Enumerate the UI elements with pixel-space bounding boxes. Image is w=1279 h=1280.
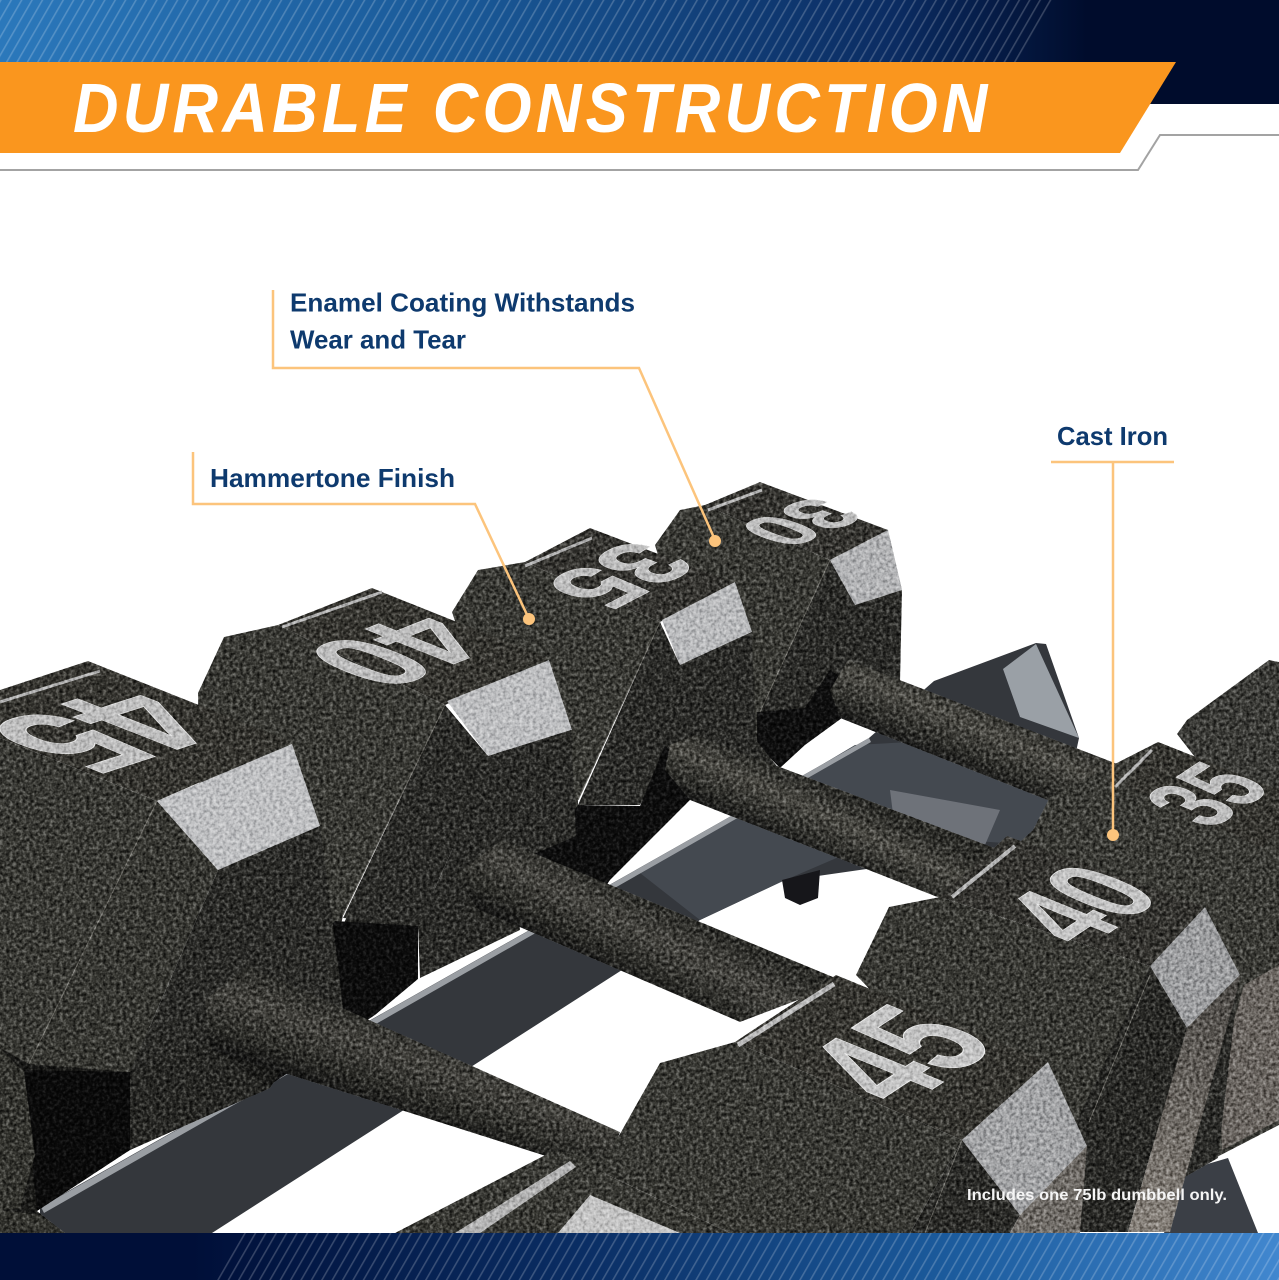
callout: enamel coating: Enamel Coating Withstands	[290, 288, 635, 318]
callout: enamel coating	[273, 288, 721, 547]
title banner: DURABLE CONSTRUCTION	[73, 70, 989, 148]
header white cut and rule	[0, 104, 1279, 190]
dumbbell 45 front row: 45	[762, 987, 1034, 1122]
dumbbell 30 back row	[655, 482, 902, 768]
footnote: Includes one 75lb dumbbell only.	[967, 1187, 1227, 1204]
callout: enamel coating: Wear and Tear	[290, 324, 466, 354]
dumbbell 30 back row: 30	[716, 489, 884, 555]
dumbbell 35 back row: 35	[519, 530, 723, 620]
dumbbell 35 front row	[1020, 742, 1279, 1172]
callout: cast iron: Cast Iron	[1057, 421, 1168, 451]
title banner	[0, 62, 1176, 153]
callout: hammertone finish	[193, 452, 535, 625]
handle 30	[830, 660, 1120, 805]
handle 40	[455, 840, 845, 1022]
dumbbell 40 back row	[198, 588, 576, 1085]
handle 35	[665, 735, 1005, 900]
header band	[0, 0, 1279, 104]
dumbbell bottom front	[395, 1150, 730, 1233]
callout: hammertone finish: Hammertone Finish	[210, 463, 455, 493]
dumbbell 40 front row: 40	[970, 849, 1192, 960]
dumbbell 40 front row	[856, 836, 1240, 1232]
dumbbell rack	[40, 643, 1258, 1233]
handle 45	[205, 966, 620, 1175]
dumbbell top right	[1177, 660, 1279, 800]
dumbbell 45 front row	[555, 975, 1087, 1233]
dumbbell 35 back row	[452, 528, 780, 895]
dumbbell 45 back row	[0, 661, 345, 1233]
callout: cast iron	[1051, 421, 1174, 841]
dumbbell 40 back row: 40	[270, 599, 528, 702]
footer band	[0, 1233, 1279, 1280]
